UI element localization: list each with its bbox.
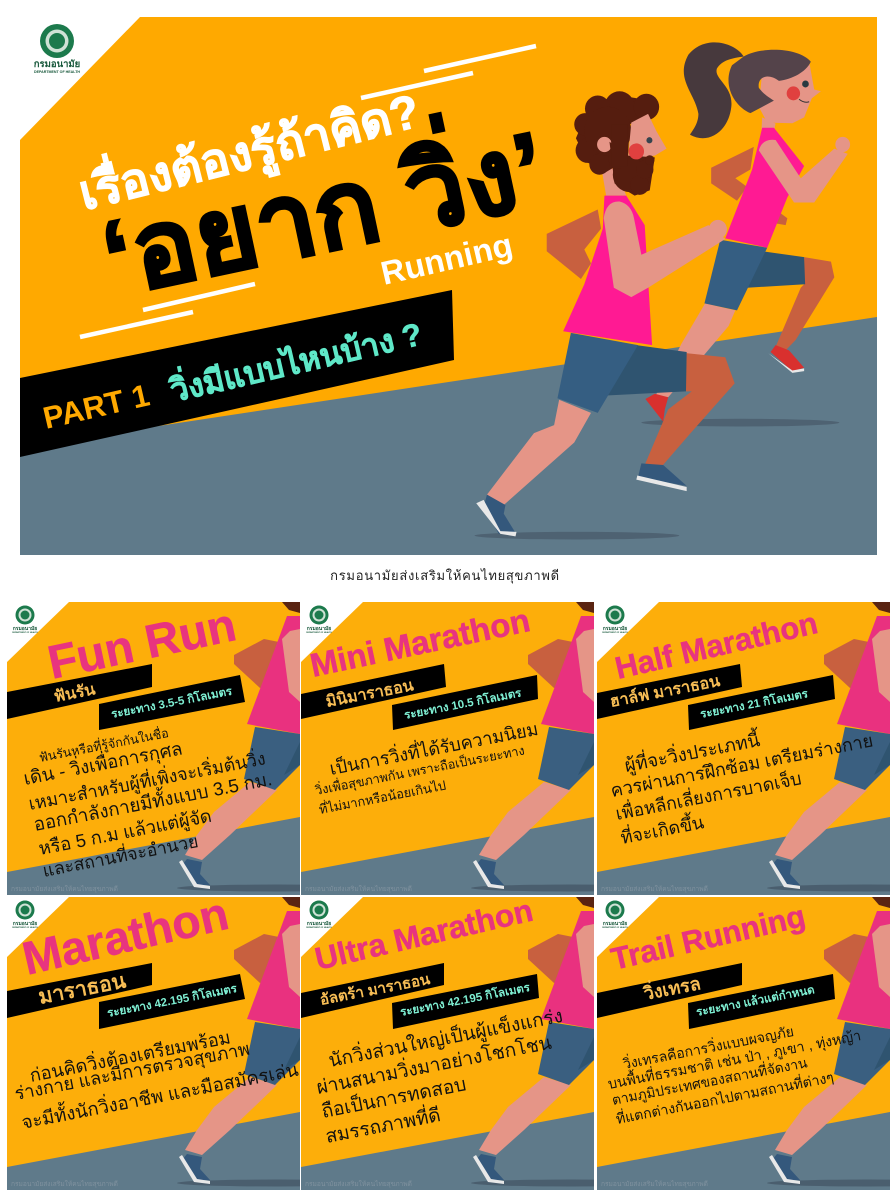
distance: ระยะทาง แล้วแต่กำหนด	[695, 982, 816, 1019]
title: Trail Running	[608, 898, 809, 977]
panel: Fun Run: กรมอนามัยส่งเสริมให้คนไทยสุขภาพดี	[11, 885, 118, 893]
body text	[606, 1022, 862, 1127]
panel: Mini Marathon: กรมอนามัยส่งเสริมให้คนไทยสุขภาพดี	[305, 885, 412, 893]
distance: ระยะทาง 10.5 กิโลเมตร	[403, 684, 523, 722]
orange background	[20, 17, 877, 555]
panel: Ultra Marathon: กรมอนามัยส่งเสริมให้คนไทยสุขภาพดี	[305, 1180, 412, 1188]
panel: Trail Running	[597, 897, 896, 1190]
bearded man runner	[476, 91, 735, 536]
heading line 1: เรื่องต้องรู้ถ้าคิด?	[72, 77, 426, 224]
distance: ระยะทาง 42.195 กิโลเมตร	[399, 979, 532, 1019]
title: Mini Marathon	[307, 601, 533, 684]
panel: Trail Running: กรมอนามัยส่งเสริมให้คนไทยสุขภาพดี	[601, 1180, 708, 1188]
Thai name: วิ่งเทรล	[640, 970, 702, 1004]
Thai name: อัลตร้า มาราธอน	[319, 971, 432, 1009]
heading main: ‘อยาก วิ่ง’	[89, 94, 556, 318]
body text: ออกกำลังกายมีทั้งแบบ 3.5 กม.	[31, 765, 274, 835]
body text: จะมีทั้งนักวิ่งอาชีพ และมือสมัครเล่น	[19, 1056, 300, 1133]
body text: ร่างกาย และมีการตรวจสุขภาพ	[13, 1039, 252, 1105]
part 1 banner: PART 1	[40, 377, 153, 436]
body text: วิ่งเพื่อสุขภาพกัน เพราะถือเป็นระยะทาง	[314, 742, 526, 799]
panel: Half Marathon	[597, 602, 896, 895]
body text	[314, 725, 538, 814]
Thai name: ฮาล์ฟ มาราธอน	[608, 671, 722, 711]
logo: department of health	[34, 24, 80, 74]
body text: เหมาะสำหรับผู้ที่เพิ่งจะเริ่มต้นวิ่ง	[26, 745, 267, 815]
Thai name: มาราธอน	[37, 969, 128, 1009]
body text: วิ่งเทรลคือการวิ่งแบบผจญภัย	[621, 1022, 795, 1072]
panel: Half Marathon: กรมอนามัยส่งเสริมให้คนไทยสุขภาพดี	[601, 885, 708, 893]
body text: ตามภูมิประเทศของสถานที่จัดงาน	[610, 1053, 809, 1109]
body text: และสถานที่จะอำนวย	[41, 829, 200, 881]
body text	[609, 726, 875, 848]
body text: ควรผ่านการฝึกซ้อม เตรียมร่างกาย	[609, 730, 875, 801]
title: Half Marathon	[612, 605, 821, 686]
body text	[21, 724, 274, 881]
logo: department of health: กรมอนามัย	[34, 59, 80, 70]
heading Running: Running	[377, 226, 516, 292]
Thai name: ฟันรัน	[52, 680, 97, 706]
main poster	[20, 17, 877, 555]
body text: เดิน - วิ่งเพื่อการกุศล	[21, 736, 185, 791]
body text: สมรรถภาพที่ดี	[323, 1101, 442, 1148]
title: Fun Run	[43, 597, 240, 689]
part 1 banner: วิ่งมีแบบไหนบ้าง ?	[164, 311, 425, 409]
runners illustration	[475, 42, 850, 539]
caption: กรมอนามัยส่งเสริมให้คนไทยสุขภาพดี	[330, 568, 560, 584]
Thai name: มินิมาราธอน	[324, 676, 415, 711]
decorative speed lines	[80, 46, 536, 337]
body text: ที่จะเกิดขึ้น	[618, 809, 706, 848]
body text: ผู้ที่จะวิ่งประเภทนี้	[622, 726, 762, 777]
body text: เป็นการวิ่งที่ได้รับความนิยม	[327, 716, 540, 779]
body text: ที่แตกต่างกันออกไปตามสถานที่ต่างๆ	[614, 1067, 835, 1127]
body text	[16, 1032, 298, 1128]
body text: ถือเป็นการทดสอบ	[319, 1071, 468, 1123]
panel: Mini Marathon	[301, 602, 594, 895]
title: Ultra Marathon	[311, 892, 536, 977]
body text: ที่ไม่มากหรือน้อยเกินไป	[318, 777, 447, 817]
distance: ระยะทาง 21 กิโลเมตร	[699, 685, 810, 721]
distance: ระยะทาง 3.5-5 กิโลเมตร	[110, 683, 234, 721]
body text: บนพื้นที่ธรรมชาติ เช่น ป่า , ภูเขา , ทุ่งหญ้า	[606, 1025, 862, 1093]
logo: department of health: DEPARTMENT OF HEALTH	[34, 70, 80, 74]
ground	[20, 317, 877, 555]
body text: นักวิ่งส่วนใหญ่เป็นผู้แข็งแกร่ง	[326, 1002, 565, 1072]
body text: หรือ 5 ก.ม แล้วแต่ผู้จัด	[37, 806, 213, 860]
panel: Fun Run	[7, 602, 300, 895]
part 1 banner	[20, 290, 454, 457]
distance: ระยะทาง 42.195 กิโลเมตร	[106, 980, 239, 1020]
body text: ก่อนคิดวิ่งต้องเตรียมพร้อม	[27, 1024, 232, 1086]
body text	[318, 1009, 562, 1142]
panel: Marathon: กรมอนามัยส่งเสริมให้คนไทยสุขภาพดี	[11, 1180, 118, 1188]
panel: Ultra Marathon	[301, 897, 594, 1190]
woman runner	[645, 42, 850, 422]
panel: Marathon	[7, 897, 300, 1190]
body text: ผ่านสนามวิ่งมาอย่างโชกโชน	[314, 1029, 553, 1099]
body text: เพื่อหลีกเลี่ยงการบาดเจ็บ	[613, 765, 803, 824]
body text: ฟันรันหรือที่รู้จักกันในชื่อ	[38, 724, 170, 766]
title: Marathon	[18, 887, 233, 985]
